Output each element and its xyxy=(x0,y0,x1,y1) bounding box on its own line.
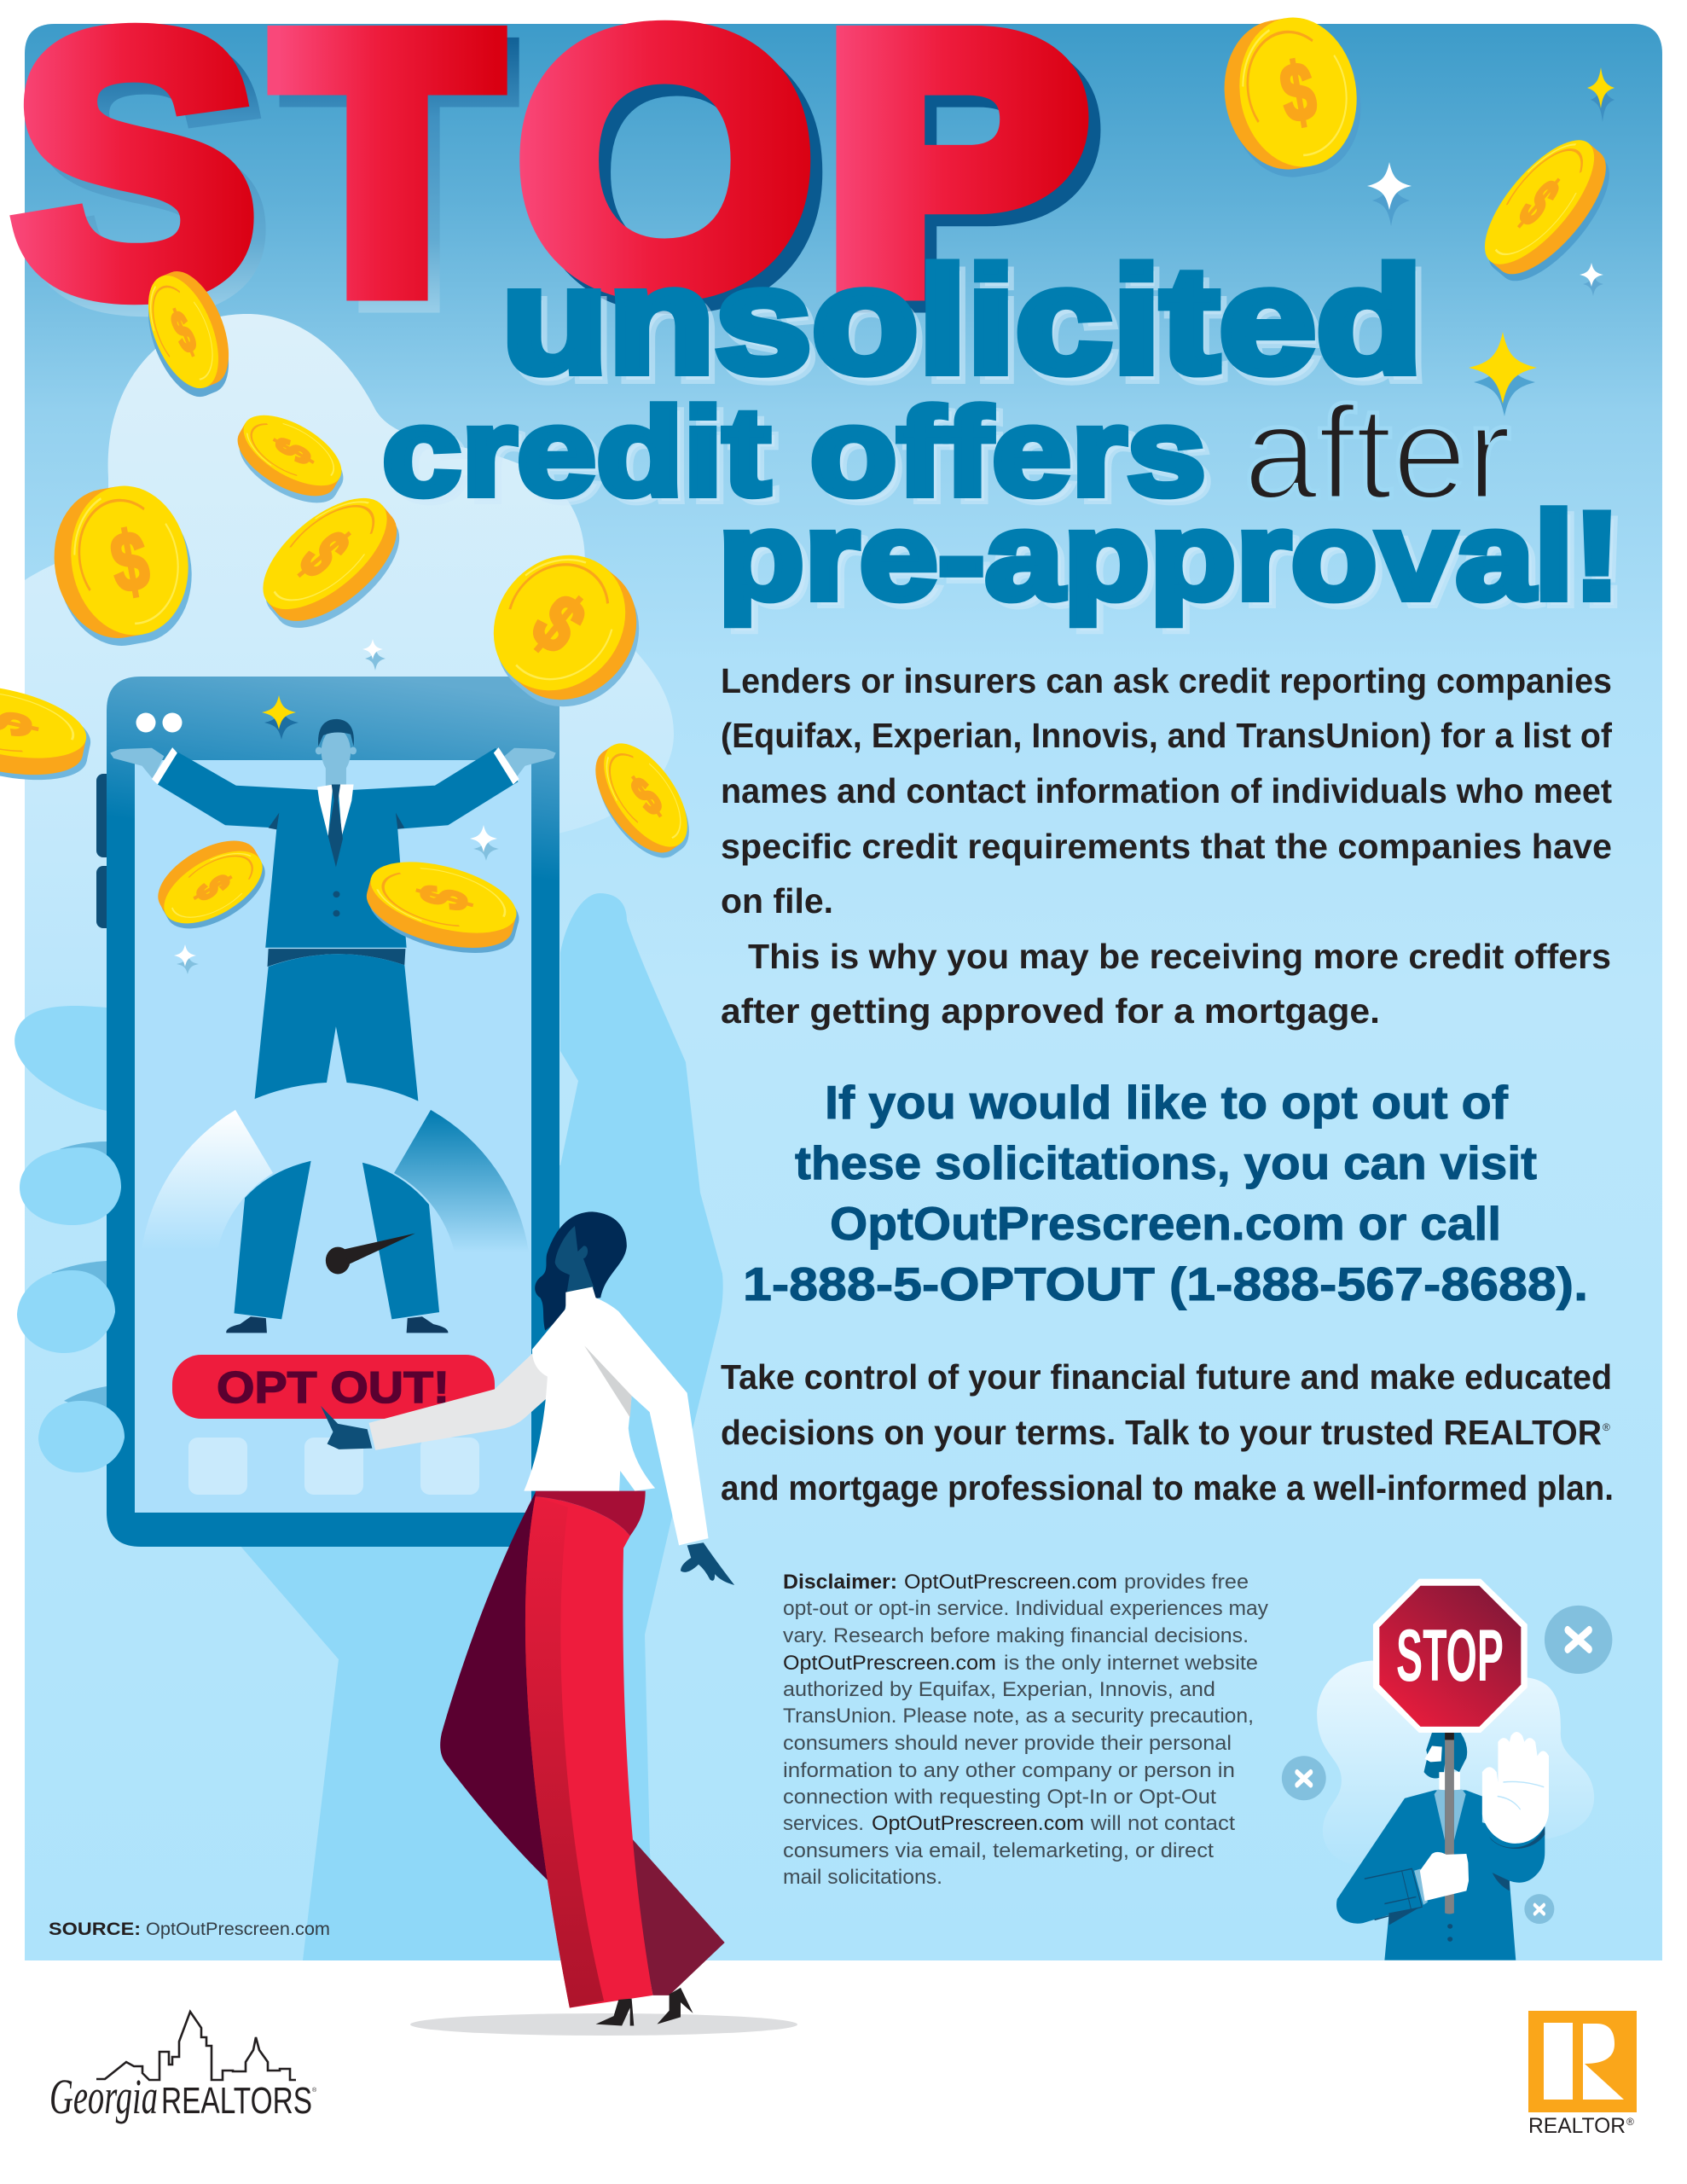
text block: explanation: (Equifax, Experian, Innovis, and TransUnion) for a list of xyxy=(721,716,1612,755)
text block: disclaimer: mail solicitations. xyxy=(783,1866,942,1889)
illustration: phone xyxy=(96,677,559,1547)
text block: disclaimer: services. xyxy=(783,1812,864,1835)
title: unsolicited credit offers after pre-approval: unsolicited xyxy=(507,245,1429,412)
text block: disclaimer: connection with requesting Opt-In or Opt-Out xyxy=(783,1786,1216,1809)
text block: explanation: on file. xyxy=(721,881,833,921)
text block: explanation: Lenders or insurers can ask credit reporting companies xyxy=(721,661,1612,700)
heading: how to opt out: these solicitations, you can visit xyxy=(795,1136,1537,1189)
text block: disclaimer: Disclaimer: xyxy=(783,1571,897,1594)
text block: disclaimer: OptOutPrescreen.com xyxy=(872,1812,1084,1835)
illustration: fingers over phone xyxy=(17,1147,125,1472)
heading: how to opt out: If you would like to opt out of xyxy=(825,1076,1509,1129)
source line xyxy=(49,1920,330,1939)
title: unsolicited credit offers after pre-approval: after xyxy=(1244,379,1511,526)
title: unsolicited credit offers after pre-approval xyxy=(382,237,1627,631)
icon: sparkles xyxy=(174,67,1615,974)
woman's hand on button xyxy=(321,1406,372,1449)
text block: explanation: names and contact information of individuals who meet xyxy=(721,771,1612,810)
text block: disclaimer xyxy=(783,1571,1268,1889)
text block: disclaimer: authorized by Equifax, Experian, Innovis, and xyxy=(783,1678,1215,1701)
text block: disclaimer: information to any other company or person in xyxy=(783,1759,1235,1782)
text block: explanation: This is why you may be receiving more credit offers xyxy=(748,937,1611,976)
text block: disclaimer: provides free xyxy=(1124,1571,1249,1594)
text block: disclaimer: vary. Research before making financial decisions. xyxy=(783,1624,1249,1647)
text block: disclaimer: consumers should never provide their personal xyxy=(783,1732,1232,1755)
text block: disclaimer: opt-out or opt-in service. Individual experiences may xyxy=(783,1597,1268,1620)
button: OPT OUT xyxy=(172,1355,495,1419)
logo: Georgia REALTORS: ® xyxy=(312,2087,317,2094)
text block: explanation: after getting approved for a mortgage. xyxy=(721,991,1380,1031)
heading: how to opt out xyxy=(743,1076,1588,1310)
icon: gold coins: $ xyxy=(1274,44,1322,140)
logo: REALTOR mark: ® xyxy=(1626,2116,1634,2128)
text block: explanation: specific credit requirements that the companies have xyxy=(721,827,1612,866)
logo: Georgia REALTORS: REALTORS xyxy=(161,2080,312,2122)
icon: gold coins: $ xyxy=(163,298,203,366)
illustration: woman pressing opt out xyxy=(369,1211,734,2026)
title: unsolicited credit offers after pre-approval: unsolicited xyxy=(501,237,1423,404)
logo: REALTOR mark xyxy=(1528,2011,1637,2138)
text block: disclaimer: OptOutPrescreen.com xyxy=(904,1571,1117,1594)
icon: gold coins: $ xyxy=(283,516,366,591)
text block: take control: decisions on your terms. Talk to your trusted REALTOR xyxy=(721,1413,1602,1452)
title: unsolicited credit offers after pre-approval: pre-approval! xyxy=(725,492,1627,631)
icon: gold coins: $ xyxy=(1505,166,1572,241)
text block: take control: Take control of your financial future and make educated xyxy=(721,1357,1612,1397)
text block: disclaimer: is the only internet website xyxy=(1004,1652,1258,1675)
logo: Georgia REALTORS xyxy=(49,2012,317,2124)
logo: REALTOR mark: REALTOR xyxy=(1528,2114,1626,2138)
illustration: hand holding phone xyxy=(14,893,723,1960)
text block: disclaimer: consumers via email, telemarketing, or direct xyxy=(783,1839,1214,1862)
text block: take control xyxy=(721,1357,1614,1507)
icon: gold coins: $ xyxy=(186,867,241,908)
text block: take control: ® xyxy=(1603,1421,1610,1433)
sign text: STOP: STOP xyxy=(1396,1615,1504,1697)
shadow under woman xyxy=(410,2013,797,2036)
text block: take control: and mortgage professional to make a well-informed plan. xyxy=(721,1468,1614,1507)
icon: gold coins: $ xyxy=(622,766,672,828)
icon: gold coins: $ xyxy=(264,430,322,473)
button: OPT OUT: OPT OUT! xyxy=(217,1363,449,1413)
source line: OptOutPrescreen.com xyxy=(146,1920,330,1939)
title: unsolicited credit offers after pre-approval: credit offers xyxy=(382,382,1206,521)
icon: gold coins: $ xyxy=(406,879,484,917)
heading: how to opt out: OptOutPrescreen.com or call xyxy=(830,1197,1501,1250)
icon: gold coins: $ xyxy=(104,513,155,611)
illustration: gauge xyxy=(142,1110,529,1252)
icon: gold coins: $ xyxy=(515,577,602,671)
icon: gold coins xyxy=(0,9,1627,967)
illustration: man holding stop sign xyxy=(1282,1579,1612,1960)
text block: disclaimer: TransUnion. Please note, as a security precaution, xyxy=(783,1705,1254,1728)
illustration: businessman xyxy=(110,719,556,1333)
text block: disclaimer: will not contact xyxy=(1090,1812,1235,1835)
heading: how to opt out: 1-888-5-OPTOUT (1-888-567-8688). xyxy=(743,1258,1588,1310)
title: unsolicited credit offers after pre-approval: credit offers xyxy=(389,388,1213,527)
text block: disclaimer: OptOutPrescreen.com xyxy=(783,1652,996,1675)
logo: Georgia REALTORS: Georgia xyxy=(49,2069,158,2124)
title: unsolicited credit offers after pre-approval: pre-approval! xyxy=(718,486,1620,625)
text block: explanation xyxy=(721,661,1612,1031)
source line: SOURCE: xyxy=(49,1920,141,1939)
illustration: cloud behind phone xyxy=(25,314,674,1066)
word: STOP shadow xyxy=(25,0,1098,380)
word: STOP xyxy=(13,0,1086,369)
